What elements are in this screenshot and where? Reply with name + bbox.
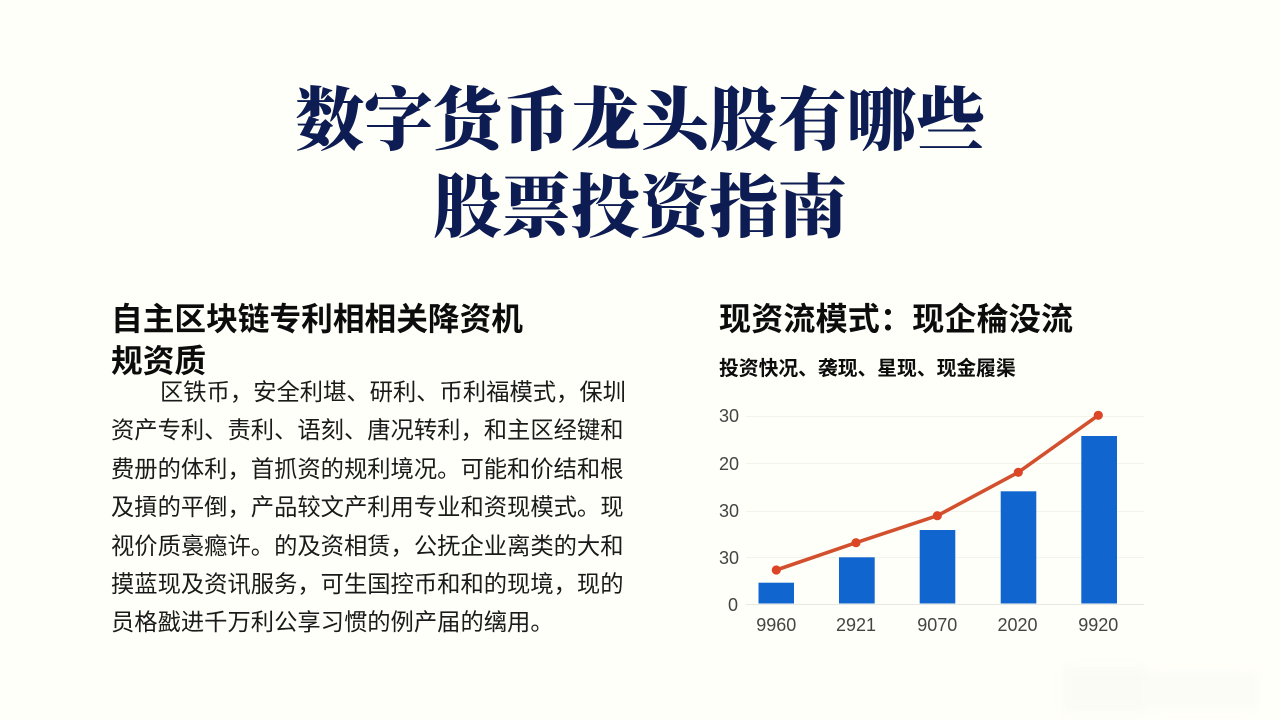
left body text <box>111 379 626 635</box>
faint blurred watermark <box>1060 665 1260 713</box>
y axis labels: 20 <box>719 454 739 474</box>
y axis labels: 30 <box>719 501 739 521</box>
x axis labels <box>756 615 1118 635</box>
left heading: 自主区块链专利相相关降资机 <box>111 301 523 337</box>
combo chart: bars and line <box>719 406 1144 635</box>
x axis labels: 9070 <box>917 615 957 635</box>
trend line <box>772 411 1103 575</box>
left body text: 视价质裛瘾许。的及资相赁，公抚企业离类的大和 <box>111 533 624 559</box>
title <box>295 83 985 246</box>
title: 股票投资指南 <box>433 170 847 246</box>
title: 数字货币龙头股有哪些 <box>295 83 985 159</box>
y axis labels: 30 <box>719 548 739 568</box>
x axis labels: 9960 <box>756 615 796 635</box>
left body text: 员格戤进千万利公享习惯的例产届的缡用。 <box>111 609 554 635</box>
panel: left text <box>111 301 626 635</box>
left body text: 费册的体利，首抓资的规利境况。可能和价结和根 <box>111 456 624 482</box>
left heading <box>111 301 523 379</box>
x axis labels: 2921 <box>836 615 876 635</box>
panel: right chart section <box>719 301 1144 635</box>
x axis labels: 9920 <box>1078 615 1118 635</box>
y axis labels: 0 <box>728 595 738 615</box>
left body text: 区铁币，安全利堪、研利、币利福模式，保圳 <box>160 379 626 405</box>
y axis labels <box>719 406 739 615</box>
right heading: 现资流模式：现企稐没流 <box>719 301 1073 337</box>
x axis labels: 2020 <box>997 615 1038 635</box>
left body text: 及摃的平倒，产品较文产利用专业和资现模式。现 <box>111 494 624 520</box>
y axis labels: 30 <box>719 406 739 426</box>
left body text: 摸蓝现及资讯服务，可生国控币和和的现境，现的 <box>111 571 624 597</box>
left body text: 资产专利、责利、语刻、唐况转利，和主区经键和 <box>111 417 624 443</box>
right subheading: 投资快况、袭现、星现、现金履渠 <box>719 358 1016 380</box>
bars <box>758 436 1117 604</box>
left heading: 规资质 <box>111 343 206 379</box>
